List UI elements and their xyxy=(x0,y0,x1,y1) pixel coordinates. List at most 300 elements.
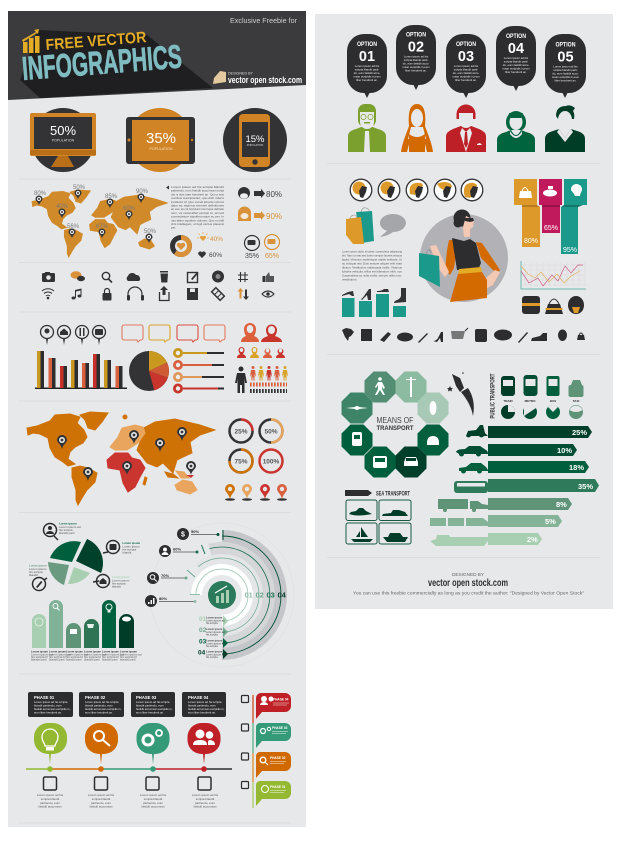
option 01: 01 xyxy=(359,49,375,65)
logo: vector open stock: vector open stock.com xyxy=(228,75,302,85)
bar labels: Lorem ipsum ad xyxy=(31,652,53,656)
stat: chat 65 percent: 65% xyxy=(265,253,279,260)
world map small with pins: 50% xyxy=(144,229,157,235)
pie callout text: Lorem ipsum xyxy=(122,544,140,548)
option 03: liber hendrerit an. xyxy=(455,78,477,82)
public transport icons: BUS xyxy=(550,399,556,403)
progress rings: 50% xyxy=(264,428,278,436)
radial callouts xyxy=(145,528,220,607)
sea transport heading: SEA TRANSPORT xyxy=(376,492,410,498)
text block: lorem ipsum: vocibus suscipiantur, quo dicit ridens xyxy=(171,196,225,200)
phase boxes: Lorem ipsum ad his scripta xyxy=(136,700,170,704)
transport bars: 8% xyxy=(556,500,567,509)
icon: eye xyxy=(262,291,274,297)
phase boxes: fastidii accumsan euripidis in, xyxy=(136,707,173,711)
text block: lorem ipsum: consectetuer signiferumque eu per. In xyxy=(171,215,224,219)
right arm xyxy=(476,242,500,274)
bar labels: Lorem ipsum xyxy=(31,650,48,654)
stat: chat 35 percent: 35% xyxy=(245,253,259,260)
pie callout text: his scripta xyxy=(29,570,43,574)
world map small with pins: 60% xyxy=(123,206,136,212)
vertical timeline with flags: PHASE 04 xyxy=(273,698,289,702)
tag columns: 80% xyxy=(524,238,538,245)
option 04: scripta blandit parti- xyxy=(504,60,528,64)
radial legend: 04 xyxy=(198,650,206,656)
text block: fashion paragraph: elit. Nam ut erat sed lorem semper laoreet tempus xyxy=(342,254,402,258)
avatar: man in suit xyxy=(446,104,486,152)
sea transport heading xyxy=(345,490,410,498)
icon: wifi xyxy=(42,289,54,299)
phase boxes: Lorem ipsum ad his scripta xyxy=(85,700,119,704)
calendar captions: fastidii accumsan xyxy=(141,804,165,808)
bar labels: his scripta bl xyxy=(49,655,66,659)
means of transport label xyxy=(376,416,414,432)
public transport label: PUBLIC TRANSPORT xyxy=(490,373,496,418)
bar labels: blandit parti xyxy=(31,658,47,662)
phase icon: magnifier xyxy=(85,723,118,764)
bar labels: Lorem ipsum xyxy=(84,650,101,654)
phase boxes: PHASE 03 xyxy=(136,695,157,700)
pie callout text: his scripta xyxy=(59,528,73,532)
option bubbles xyxy=(347,25,586,98)
icon: floppy xyxy=(187,288,198,300)
option 05: 05 xyxy=(557,50,574,66)
option 03 xyxy=(446,34,486,98)
icon: monitor 50 percent xyxy=(30,108,96,172)
stat: girl 90 percent: 90% xyxy=(266,212,282,221)
radial callouts: 50% xyxy=(191,529,199,534)
tag columns: 65% xyxy=(544,225,558,232)
calendar captions: fastidii accumsan xyxy=(89,804,113,808)
stat: chat 35 percent xyxy=(244,236,260,260)
option 01 xyxy=(347,34,387,98)
option 01: scripta blandit parti- xyxy=(355,68,379,72)
phase boxes: eum liber hendrerit an. xyxy=(34,710,62,714)
icon: phone 15 percent: POPULATION xyxy=(247,143,263,147)
radial legend: Lorem ipsum xyxy=(206,616,223,620)
footer credit: vector open stock.com xyxy=(428,578,508,589)
bar labels: his scripta bl xyxy=(31,655,48,659)
option 02: 02 xyxy=(408,40,424,56)
rocket xyxy=(447,372,474,416)
transport bars: 10% xyxy=(557,446,572,455)
text block: fashion paragraph xyxy=(342,250,402,282)
radial callouts: 80% xyxy=(159,596,167,601)
text block: fashion paragraph: vestibulum. xyxy=(342,278,357,282)
transport octagons xyxy=(342,372,448,478)
public transport icons: TAXI xyxy=(573,399,579,403)
option 01: Lorem ipsum ad his xyxy=(355,64,380,68)
icon: padlock xyxy=(102,288,112,300)
option 05 xyxy=(545,34,586,98)
speech bubble xyxy=(380,214,406,237)
bar labels: Lorem ipsum xyxy=(66,650,83,654)
icon: trash xyxy=(160,271,168,282)
option 03: Lorem ipsum ad his xyxy=(454,64,479,68)
hair and face xyxy=(454,210,474,237)
woman illustration xyxy=(419,210,508,302)
calendar captions: Lorem ipsum ad his xyxy=(37,793,64,797)
phase boxes: PHASE 04 xyxy=(188,695,209,700)
text block: lorem ipsum: an eos. Eu sit tincidunt incorrupte definitio xyxy=(171,207,224,211)
vertical timeline with flags: PHASE 03 xyxy=(272,726,288,730)
pie callout text: blandit xyxy=(29,573,38,577)
center badge xyxy=(208,581,236,609)
phase icon: people xyxy=(188,723,220,764)
option 03: msan euripidis in,eum xyxy=(452,74,480,78)
radial legend: 01 xyxy=(199,616,207,623)
text block: lorem ipsum: dans eq, tegimus senserit definitiones xyxy=(171,204,225,208)
bar labels: Lorem ipsum ad xyxy=(84,652,106,656)
radial legend: his scripta xyxy=(206,655,218,659)
tag columns: 95% xyxy=(563,247,577,254)
logo: vector open stock: DESIGNED BY xyxy=(228,72,254,76)
map pins xyxy=(57,427,196,481)
option 03: scripta blandit parti- xyxy=(454,68,478,72)
hair circle icons xyxy=(350,179,483,201)
footer credit: DESIGNED BY xyxy=(452,572,484,577)
world map small with pins: 67% xyxy=(96,224,109,230)
location pins xyxy=(225,484,287,501)
icon: note edit xyxy=(188,272,198,282)
text block: lorem ipsum: inciderint id. Quo mundi lobortis reformi xyxy=(171,200,224,204)
world map small with pins: 80% xyxy=(34,191,47,197)
logo: vector open stock xyxy=(213,71,302,85)
calendar captions: scripta blandit xyxy=(144,797,162,801)
bar labels: blandit parti xyxy=(49,658,65,662)
transport bars xyxy=(488,426,599,545)
icon: monitor 50 percent: 50% xyxy=(50,123,76,138)
vertical timeline with flags: PHASE 01 xyxy=(270,785,286,789)
option 05: scripta blandit parti- xyxy=(553,68,578,72)
avatar: woman with long hair xyxy=(401,104,433,152)
icon: up down arrows xyxy=(238,288,249,300)
radial legend: 02 xyxy=(199,627,207,634)
text block: lorem ipsum: partiendo, eum fastidii accumsan euripi xyxy=(171,189,224,193)
calendar captions xyxy=(37,793,219,808)
calendar captions: partiendo, eum xyxy=(143,801,164,805)
accessories icon row xyxy=(342,328,585,343)
bar labels: his scripta bl xyxy=(120,655,137,659)
calendar captions: Lorem ipsum ad his xyxy=(88,793,115,797)
panel: right background xyxy=(315,14,613,609)
phase boxes: Lorem ipsum ad his scripta xyxy=(34,700,68,704)
radial digits xyxy=(244,590,287,600)
icon: search xyxy=(102,272,112,282)
pin icons row xyxy=(40,326,106,345)
option 04: do, eum fastidii accu- xyxy=(503,63,529,67)
chart: heart donut xyxy=(170,235,192,257)
radial digits: 01 xyxy=(244,590,253,600)
option 02: do, eum fastidii accu- xyxy=(403,62,429,66)
bar labels: Lorem ipsum ad xyxy=(102,652,124,656)
calendar captions: scripta blandit xyxy=(196,797,214,801)
radial callouts: 60% xyxy=(173,546,181,552)
phase boxes: blandit partiendo, eum xyxy=(34,704,62,708)
progress rings: 25% xyxy=(234,428,248,436)
icon: phone 15 percent xyxy=(223,108,287,172)
icon: camera xyxy=(42,272,55,282)
radial legend xyxy=(198,615,228,659)
pie callout icons xyxy=(32,524,120,590)
phase icon: bulb xyxy=(34,723,67,764)
bar labels: Lorem ipsum xyxy=(49,650,66,654)
stat: heart 60 percent: 60% xyxy=(209,252,222,259)
radial digits: 02 xyxy=(256,590,264,600)
text block: fashion paragraph: ac volutpat nisl. Duis semper aliquet velit vitae xyxy=(342,262,402,266)
option 02 xyxy=(396,25,436,90)
exclusive freebie note: Exclusive Freebie for xyxy=(230,16,297,25)
option 02: liber hendrerit an. xyxy=(405,68,427,72)
transport bars: 5% xyxy=(545,517,556,526)
stat: boy 80 percent: 80% xyxy=(266,190,282,199)
icon: hash xyxy=(238,272,248,282)
header banner xyxy=(8,11,306,100)
calendar captions: scripta blandit xyxy=(41,797,59,801)
radial legend: Lorem ipsum ad xyxy=(206,630,225,634)
stat: heart 40 percent: 40% xyxy=(210,236,223,243)
phase boxes: blandit partiendo, eum xyxy=(85,704,113,708)
text block: fashion paragraph: lobortis vehicula, tellus est bibendum nibh, non xyxy=(342,270,402,274)
line chart xyxy=(521,261,586,289)
pie callout text: blandit xyxy=(112,584,121,588)
option 05: Lorem ipsum ad his xyxy=(553,64,578,68)
bar labels: his scripta bl xyxy=(66,655,83,659)
phase boxes: PHASE 02 xyxy=(85,695,106,700)
phase boxes: PHASE 01 xyxy=(34,695,55,700)
means of transport label: TRANSPORT xyxy=(376,426,414,432)
world map small with pins xyxy=(32,185,167,257)
public transport icons: METRO xyxy=(525,399,536,403)
icon: share xyxy=(160,286,169,300)
text block: lorem ipsum: dis ni duis idae hendrerit an. Qui ut wisi xyxy=(171,192,224,196)
radial callouts: $ xyxy=(181,532,185,538)
option 02: Lorem ipsum ad his xyxy=(404,54,429,58)
icon: monitor 50 percent: POPULATION xyxy=(52,138,75,142)
vertical timeline with flags: PHASE 02 xyxy=(270,756,286,760)
option 04 xyxy=(496,26,536,91)
vertical timeline with flags xyxy=(242,693,291,808)
handbag icons xyxy=(522,296,584,314)
option 01: OPTION xyxy=(357,41,377,48)
text block: fashion paragraph: Lorem ipsum dolor sit amet, consectetur adipiscing xyxy=(342,250,402,254)
icon: tablet 35 percent: POPULATION xyxy=(150,147,173,151)
radial legend: his scripta xyxy=(206,632,218,636)
phase icon: gears xyxy=(136,723,170,764)
radial legend: his scripta xyxy=(206,644,218,648)
phase boxes: eum liber hendrerit an. xyxy=(85,710,113,714)
means of transport label: MEANS OF xyxy=(376,416,414,425)
bar chart xyxy=(35,351,127,389)
option 03: OPTION xyxy=(456,41,476,48)
public transport icons xyxy=(501,375,584,419)
icon: tablet 35 percent: 35% xyxy=(146,130,176,147)
title: free vector: FREE VECTOR xyxy=(45,29,147,54)
text block: lorem ipsum: nem, vis mutat affert percipit cu, eirmod xyxy=(171,211,224,215)
calendar captions: fastidii accumsan xyxy=(193,804,217,808)
green exploded pie xyxy=(29,522,141,590)
world map small with pins: 56% xyxy=(67,224,80,230)
radial legend: Lorem ipsum xyxy=(206,627,223,631)
world map small with pins: 85% xyxy=(105,194,118,200)
radial callouts: 70% xyxy=(161,573,169,578)
belt and skirt xyxy=(458,267,482,275)
radial legend: Lorem ipsum ad xyxy=(206,618,225,622)
world map small with pins: 50% xyxy=(73,185,86,191)
option 01: msan euripidis in,eum xyxy=(353,74,381,78)
icon grid xyxy=(42,270,274,300)
radial legend: Lorem ipsum xyxy=(206,650,223,654)
phase boxes: eum liber hendrerit an. xyxy=(188,710,216,714)
text block: fashion paragraph: Suspendisse ac nulla mollis, semper tellus non, xyxy=(342,274,402,278)
stat: heart 60 percent xyxy=(198,251,222,259)
stat: boy 80 percent xyxy=(238,187,282,199)
speech boxes xyxy=(122,325,225,342)
option 04: 04 xyxy=(508,41,524,57)
panel: left background xyxy=(8,11,306,827)
vehicle icons xyxy=(430,425,488,546)
bar labels: Lorem ipsum xyxy=(120,650,137,654)
avatar: man spiky hair xyxy=(545,105,585,152)
bar labels: Lorem ipsum xyxy=(102,650,119,654)
progress rings: 75% xyxy=(234,458,248,466)
icon: headphones xyxy=(127,287,144,300)
icon: film xyxy=(212,288,224,300)
option 03: 03 xyxy=(458,49,474,65)
tag columns xyxy=(514,179,587,254)
option 04: Lorem ipsum ad his xyxy=(504,56,529,60)
bar labels: his scripta bl xyxy=(84,655,101,659)
phase boxes: fastidii accumsan euripidis in, xyxy=(85,707,122,711)
shoe bar chart xyxy=(342,288,406,317)
slider bars xyxy=(173,348,224,394)
option 02: msan euripidis in,eum xyxy=(402,65,430,69)
text block: lorem ipsum: viris intellegam, ut fugit veritus placerat xyxy=(171,222,224,226)
text block: lorem ipsum xyxy=(166,185,225,230)
option 04: OPTION xyxy=(506,33,526,40)
footer credit xyxy=(353,572,584,596)
phase timeline xyxy=(26,692,291,808)
avatar: woman short hair xyxy=(497,111,535,152)
torso xyxy=(452,238,481,270)
bar labels: blandit parti xyxy=(66,658,82,662)
phase boxes xyxy=(28,692,226,717)
radial legend: Lorem ipsum ad xyxy=(206,652,225,656)
bar labels: blandit parti xyxy=(120,658,136,662)
transport bars: 18% xyxy=(569,463,584,472)
pie chart xyxy=(129,351,169,391)
pie callout text: Lorem ipsum xyxy=(29,567,47,571)
bar labels: his scripta bl xyxy=(102,655,119,659)
radial legend: Lorem ipsum xyxy=(206,638,223,642)
octagon icons xyxy=(346,377,439,468)
pie callout text: Lorem ipsum xyxy=(29,564,47,568)
bar labels: blandit parti xyxy=(102,658,118,662)
calendar captions: fastidii accumsan xyxy=(38,804,62,808)
transport bars: 2% xyxy=(527,535,538,544)
bar labels: blandit parti xyxy=(84,658,100,662)
column icons xyxy=(519,184,582,198)
stat: girl 90 percent xyxy=(238,207,282,221)
pie callout text: Lorem ipsum xyxy=(59,522,77,526)
option 05: do, eum fastidii accu- xyxy=(552,72,579,76)
option 03: do, eum fastidii accu- xyxy=(453,71,479,75)
world map small with pins: 40% xyxy=(56,204,69,210)
icon: tablet 35 percent xyxy=(126,108,195,172)
radial digits: 03 xyxy=(266,590,275,600)
pie callout text: Lorem ipsum ad xyxy=(59,525,81,529)
phase boxes: eum liber hendrerit an. xyxy=(136,710,164,714)
pie callout text xyxy=(29,522,141,588)
pie callout text: his scripta xyxy=(112,582,126,586)
pie callout text: blandit parti xyxy=(59,531,75,535)
people icons xyxy=(235,323,288,393)
teal bag xyxy=(419,250,440,287)
world map small with pins: 90% xyxy=(136,189,149,195)
avatars row xyxy=(348,104,585,152)
option 05: msan euripidis in,eum xyxy=(552,75,580,79)
pie callout text: his scripta xyxy=(122,548,136,552)
text block: fashion paragraph: dictum. Vestibulum malesuada mollis. Vivamus xyxy=(342,266,402,270)
bar labels: Lorem ipsum ad xyxy=(49,652,71,656)
calendar captions: partiendo, eum xyxy=(195,801,216,805)
radial legend: 03 xyxy=(199,638,207,646)
icon: cloud xyxy=(127,273,140,281)
icon: music note xyxy=(72,288,82,300)
footer credit: You can use this freebie commercially as long as you credit the author: "Designed by Vector Open Stock" xyxy=(353,590,584,596)
icon: refresh disc xyxy=(212,270,224,282)
text block: fashion paragraph: ligula. Vivamus scelerisque mattis vehicula. Ut xyxy=(342,258,402,262)
phase boxes: Lorem ipsum ad his scripta xyxy=(188,700,222,704)
stat: heart 40 percent xyxy=(197,232,223,243)
phase boxes: fastidii accumsan euripidis in, xyxy=(34,707,71,711)
pie callout text: Lorem ipsum xyxy=(112,578,130,582)
phase boxes: blandit partiendo, eum xyxy=(188,704,216,708)
progress rings: 100% xyxy=(263,458,280,466)
bar labels xyxy=(31,650,142,662)
icon: phone 15 percent: 15% xyxy=(245,134,265,145)
text block: lorem ipsum: usu latine equidem dolores. Quo no falli xyxy=(171,218,224,222)
phase boxes: blandit partiendo, eum xyxy=(136,704,164,708)
phase boxes: fastidii accumsan euripidis in, xyxy=(188,707,225,711)
sea transport boxes xyxy=(346,500,411,544)
bar labels: Lorem ipsum ad xyxy=(66,652,88,656)
option 01: do, eum fastidii accu- xyxy=(354,71,380,75)
option 04: msan euripidis in,eum xyxy=(502,66,530,70)
green rounded bar chart xyxy=(31,600,142,662)
bar labels: Lorem ipsum ad xyxy=(120,652,142,656)
calendar captions: Lorem ipsum ad his xyxy=(140,793,167,797)
public transport icons: TRAIN xyxy=(503,399,513,403)
stat: chat 65 percent xyxy=(264,234,280,260)
pie callout text: Lorem ipsum xyxy=(112,575,130,579)
icon: growth chart xyxy=(22,29,40,53)
calendar captions: Lorem ipsum ad his xyxy=(192,793,219,797)
shopping bags xyxy=(346,208,374,244)
timeline line xyxy=(26,766,232,772)
calendar captions: partiendo, eum xyxy=(40,801,61,805)
text block: lorem ipsum: Lorem ipsum ad his scripta blandit xyxy=(171,185,224,189)
radial legend: Lorem ipsum ad xyxy=(206,642,225,646)
pie callout text: blandit xyxy=(122,550,132,554)
transport bars: 35% xyxy=(578,482,593,491)
option 05: liber hendrerit an. xyxy=(555,78,577,82)
option 02: OPTION xyxy=(406,32,426,38)
avatar: man with glasses xyxy=(348,104,386,152)
option 02: scripta blandit parti- xyxy=(404,58,428,62)
calendar captions: partiendo, eum xyxy=(91,801,112,805)
option 04: liber hendrerit an. xyxy=(505,70,527,74)
